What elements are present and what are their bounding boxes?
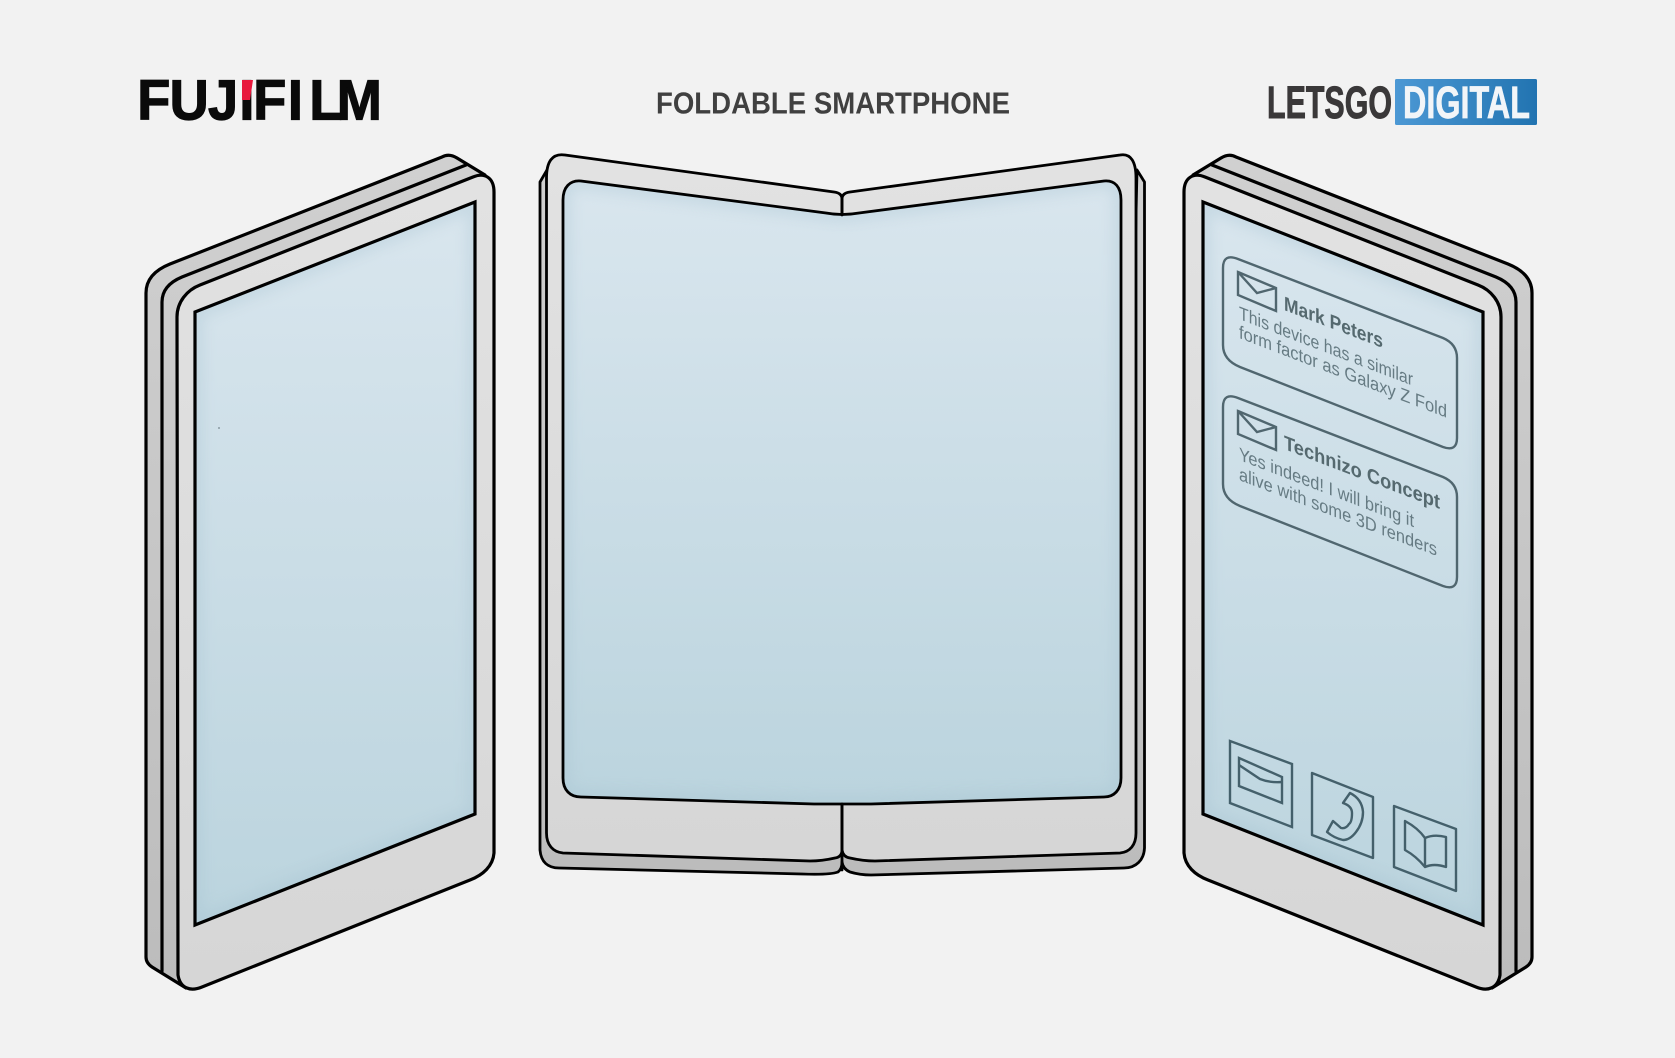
message card: Mark Peters — [1223, 257, 1457, 448]
phone: left folded view — [146, 155, 494, 989]
middle layer line — [162, 165, 466, 971]
message card: Technizo Concept: alive with some 3D renders — [1239, 465, 1437, 561]
logo: Fujifilm: FUJIFILM — [137, 68, 382, 132]
icon: book app — [1394, 806, 1456, 891]
hinge line — [841, 197, 843, 870]
icon: phone app — [1312, 773, 1373, 858]
front body left — [546, 155, 842, 861]
message card: Technizo Concept — [1223, 396, 1457, 587]
logo: LetsGoDigital: LETSGO — [1267, 77, 1392, 128]
icon: envelope — [1238, 272, 1276, 311]
title: FOLDABLE SMARTPHONE — [656, 86, 1010, 120]
phone: right folded view — [1184, 155, 1532, 989]
logo: LetsGoDigital: DIGITAL — [1403, 77, 1530, 128]
phone: center unfolded view — [540, 155, 1144, 875]
back layer — [146, 155, 485, 988]
message card: Mark Peters: Mark Peters — [1284, 293, 1383, 353]
screen — [563, 181, 1121, 804]
screen — [195, 202, 475, 925]
back plate — [540, 170, 1144, 875]
message card: Mark Peters: form factor as Galaxy Z Fold — [1239, 323, 1447, 423]
icon: mail app — [1230, 741, 1292, 827]
front body right — [842, 155, 1136, 861]
logo: LetsGoDigital — [1267, 77, 1537, 128]
phone body (mirrored) — [1184, 155, 1532, 989]
message card: Mark Peters: This device has a similar — [1239, 304, 1414, 391]
front face — [177, 175, 494, 989]
icon: envelope — [1238, 411, 1276, 450]
message card: Technizo Concept: Technizo Concept — [1284, 432, 1440, 514]
message card: Technizo Concept: Yes indeed! I will bring it — [1239, 445, 1415, 532]
